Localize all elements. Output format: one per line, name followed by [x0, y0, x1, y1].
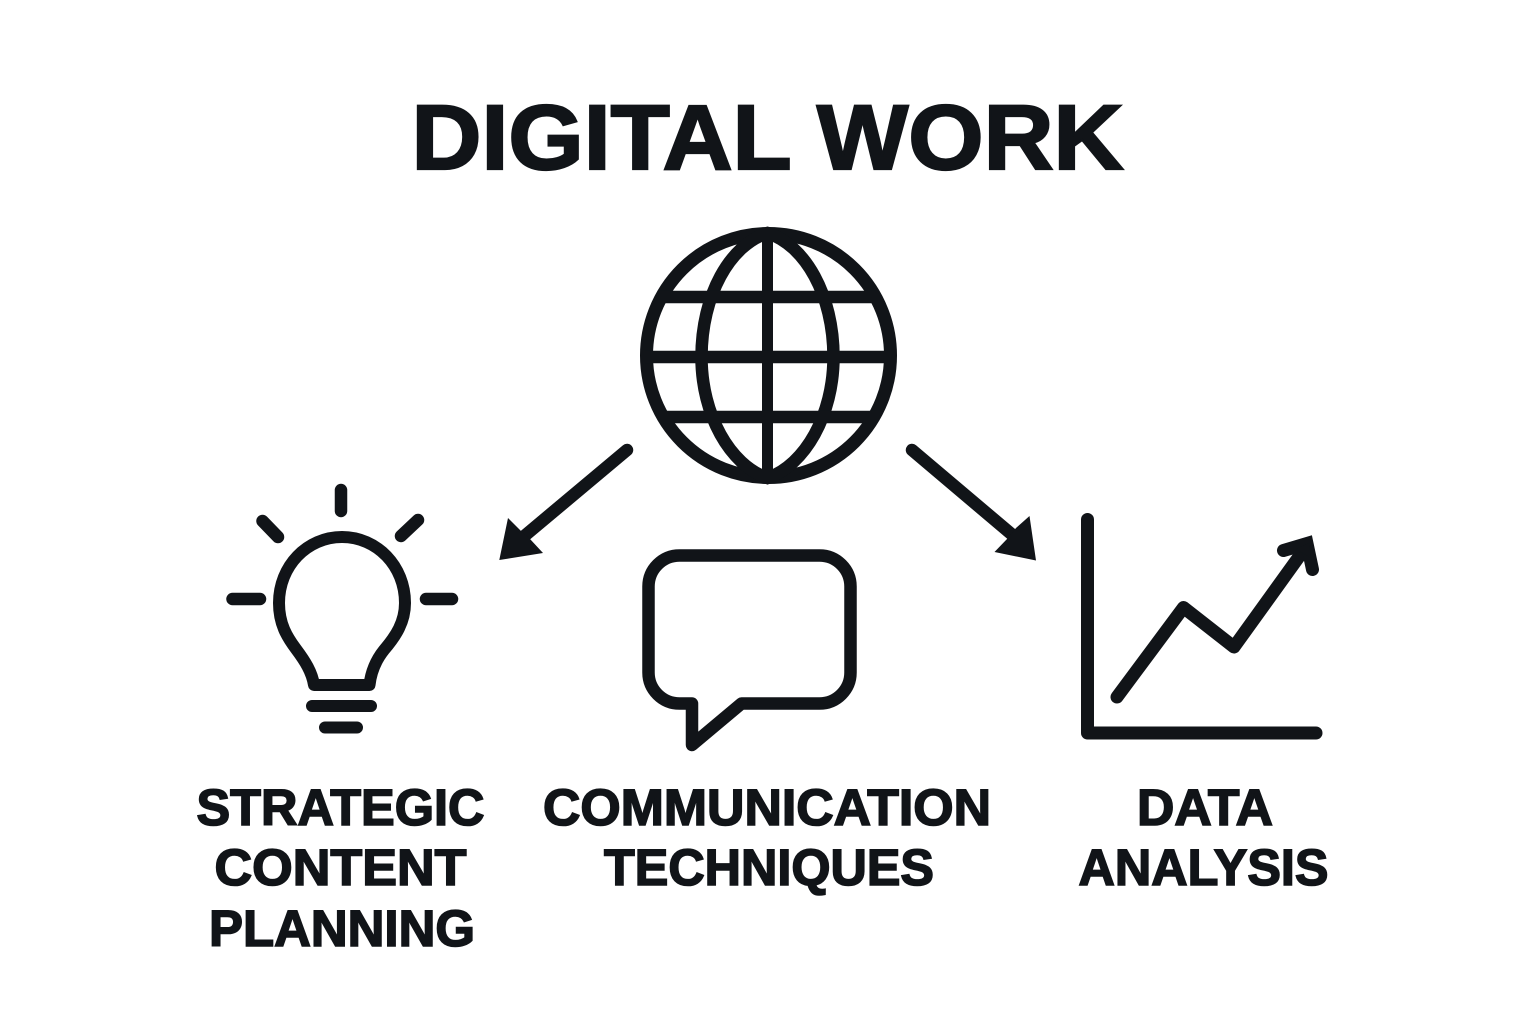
label: data analysis [1078, 779, 1328, 896]
label: strategic content planning: STRATEGIC [196, 779, 484, 836]
label: strategic content planning: CONTENT [214, 839, 466, 896]
label: strategic content planning [196, 779, 484, 957]
arrow: globe to data analysis [912, 450, 1036, 560]
icon: speech bubble [648, 556, 850, 745]
label: strategic content planning: PLANNING [209, 900, 475, 957]
label: data analysis: ANALYSIS [1078, 839, 1328, 896]
label: communication techniques: TECHNIQUES [604, 839, 934, 896]
label: data analysis: DATA [1137, 779, 1273, 836]
icon: globe [645, 233, 891, 478]
arrow: globe to strategic content planning [499, 450, 627, 560]
title: DIGITAL WORK [412, 87, 1124, 189]
label: communication techniques: COMMUNICATION [543, 779, 991, 836]
label: communication techniques [543, 779, 991, 896]
icon: line chart [1088, 520, 1316, 733]
icon: light bulb [232, 490, 452, 728]
